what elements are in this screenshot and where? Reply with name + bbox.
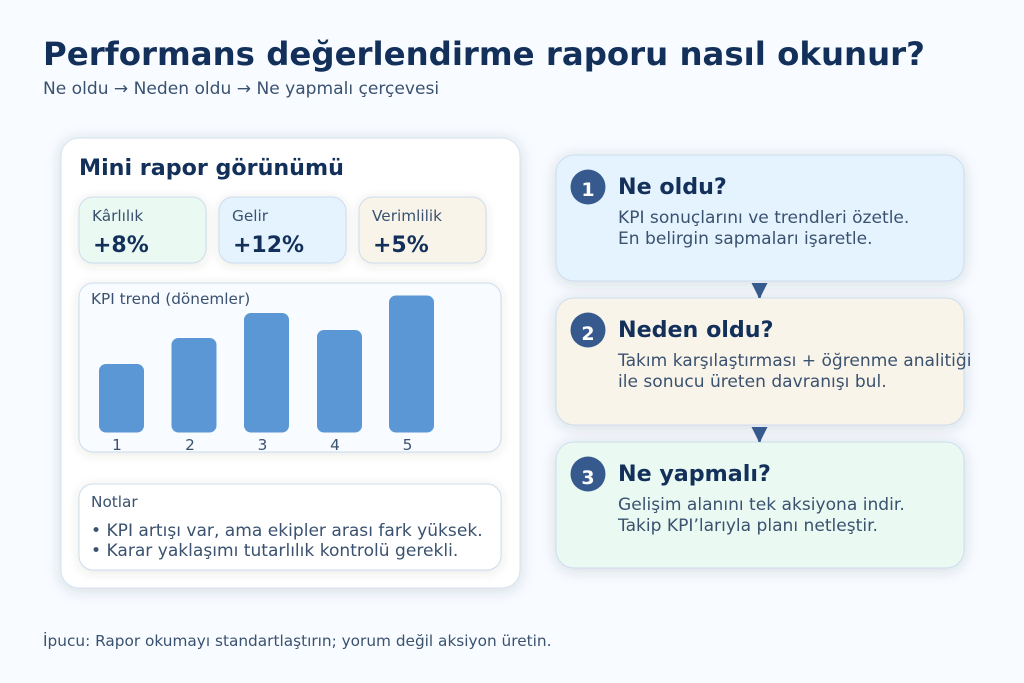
KPI card: Kârlılık: +8% bbox=[93, 233, 149, 258]
KPI card: Gelir: Gelir bbox=[232, 207, 269, 225]
panel: mini report bbox=[61, 138, 520, 588]
KPI card: Kârlılık: Kârlılık bbox=[92, 207, 143, 225]
step 1 card bbox=[556, 155, 964, 281]
notes box bbox=[79, 484, 501, 570]
bars bbox=[99, 296, 434, 432]
title: Performans değerlendirme raporu nasıl okunur? bbox=[43, 35, 925, 73]
axis labels: 3 bbox=[258, 436, 267, 454]
arrow: step 2 to 3 bbox=[752, 427, 768, 442]
step 3 card: Gelişim alanını tek aksiyona indir. bbox=[618, 495, 905, 515]
step 1 card: En belirgin sapmaları işaretle. bbox=[618, 229, 873, 249]
axis labels bbox=[112, 436, 412, 454]
step 2 card bbox=[556, 298, 971, 425]
subtitle: Ne oldu → Neden oldu → Ne yapmalı çerçevesi bbox=[43, 79, 439, 99]
axis labels: 5 bbox=[403, 436, 412, 454]
step 1 card: Ne oldu? bbox=[618, 174, 727, 200]
step 3 card bbox=[556, 442, 964, 568]
KPI card: Kârlılık bbox=[79, 197, 206, 263]
step 3 card: 3 bbox=[581, 467, 595, 489]
axis labels: 4 bbox=[330, 436, 340, 454]
KPI card: Gelir bbox=[219, 197, 346, 263]
footer tip: İpucu: Rapor okumayı standartlaştırın; yorum değil aksiyon üretin. bbox=[43, 631, 551, 650]
axis labels: 2 bbox=[185, 436, 195, 454]
panel heading: Mini rapor görünümü bbox=[79, 155, 344, 181]
KPI card: Verimlilik bbox=[359, 197, 486, 263]
step 2 card: Neden oldu? bbox=[618, 317, 773, 343]
step 2 card: 2 bbox=[581, 323, 595, 345]
step 2 card: Takım karşılaştırması + öğrenme analitiği bbox=[617, 351, 971, 371]
step 3 card: Ne yapmalı? bbox=[618, 461, 771, 487]
KPI card: Verimlilik: Verimlilik bbox=[372, 207, 442, 225]
step 2 card: ile sonucu üreten davranışı bul. bbox=[618, 372, 887, 392]
step 3 card: Takip KPI’larıyla planı netleştir. bbox=[617, 516, 878, 536]
notes box: • Karar yaklaşımı tutarlılık kontrolü gerekli. bbox=[91, 541, 458, 561]
step 1 card: 1 bbox=[581, 179, 595, 201]
axis labels: 1 bbox=[112, 436, 122, 454]
arrow: step 1 to 2 bbox=[752, 283, 768, 298]
KPI card: Gelir: +12% bbox=[233, 233, 304, 258]
step 1 card: KPI sonuçlarını ve trendleri özetle. bbox=[618, 208, 909, 228]
bar chart: KPI trend bbox=[79, 283, 501, 454]
notes box: • KPI artışı var, ama ekipler arası fark yüksek. bbox=[91, 521, 483, 541]
notes box: Notlar bbox=[91, 493, 138, 511]
bar chart: KPI trend: KPI trend (dönemler) bbox=[91, 290, 250, 308]
KPI card: Verimlilik: +5% bbox=[373, 233, 429, 258]
